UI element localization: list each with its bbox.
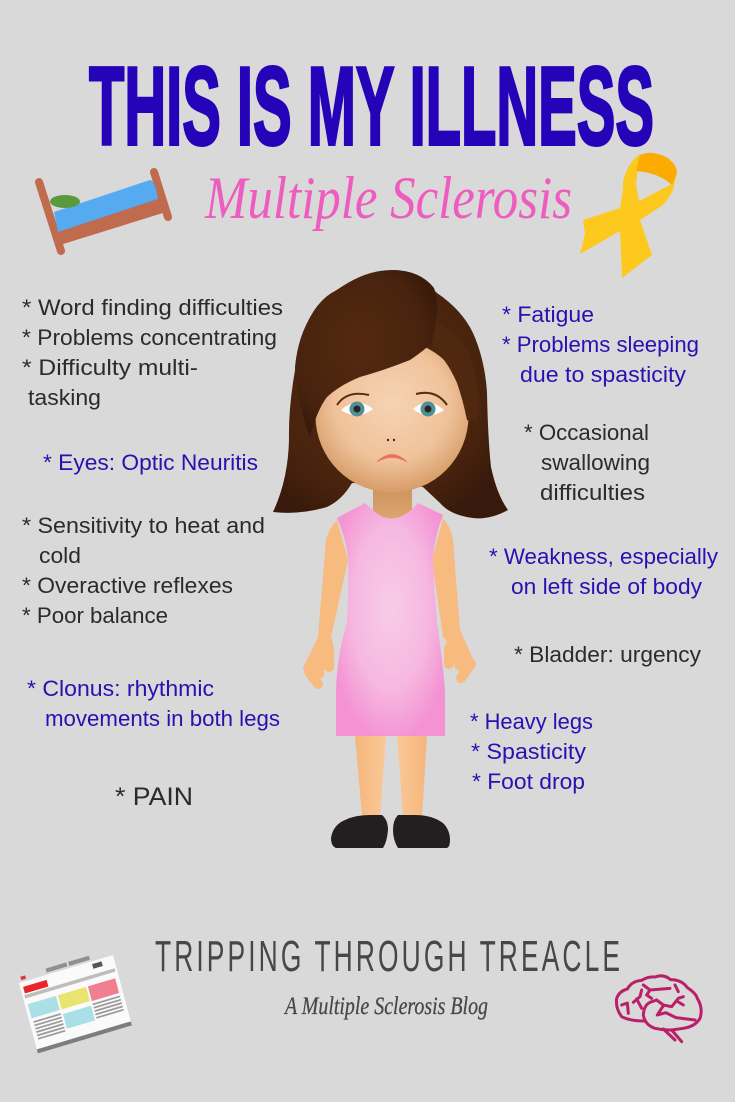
icon: awareness ribbon [580,153,677,278]
right symptoms: fatigue: * Fatigue [502,302,594,327]
left symptom: clonus [27,676,280,731]
icon: web page layout [17,949,132,1053]
left symptoms: cognitive: * Problems concentrating [22,325,277,350]
left symptoms: cognitive: * Word finding difficulties [22,295,283,320]
figure: sad girl [273,270,508,848]
icon: bed [39,172,168,251]
right symptom: swallowing: swallowing [541,450,650,475]
right symptoms: fatigue: due to spasticity [520,362,686,387]
left symptom: clonus: * Clonus: rhythmic [27,676,214,701]
blog name: TRIPPING THROUGH TREACLE [155,931,620,981]
front hair [295,270,437,437]
right symptom: weakness [489,544,718,599]
right symptom: swallowing [524,420,650,505]
face [316,340,468,492]
left symptoms: cognitive [22,295,283,410]
mouth [377,454,407,462]
blog tagline: A Multiple Sclerosis Blog [283,993,488,1020]
right symptom: swallowing: difficulties [540,480,645,505]
left symptoms: sensory and balance: cold [39,543,81,568]
neck [373,478,412,520]
left symptoms: cognitive: tasking [28,385,101,410]
left symptoms: sensory and balance: * Sensitivity to heat and [22,513,265,538]
left symptoms: cognitive: * Difficulty multi- [22,355,198,380]
right symptom: bladder: * Bladder: urgency [514,642,701,667]
nose [387,439,389,441]
left symptoms: sensory and balance [22,513,265,628]
left symptoms: sensory and balance: * Poor balance [22,603,168,628]
dress [336,503,445,736]
right symptoms: fatigue [502,302,699,387]
right symptoms: legs: * Foot drop [472,769,585,794]
right symptoms: legs: * Spasticity [471,739,586,764]
right symptoms: fatigue: * Problems sleeping [502,332,699,357]
arms [303,518,475,684]
left symptom: eyes: * Eyes: Optic Neuritis [43,450,258,475]
right symptom: weakness: on left side of body [511,574,702,599]
right symptom: weakness: * Weakness, especially [489,544,718,569]
left symptom: pain: * PAIN [115,783,193,811]
left symptom: clonus: movements in both legs [45,706,280,731]
eyebrows [337,393,447,405]
hair back [273,270,508,518]
subtitle: Multiple Sclerosis [204,165,572,231]
right symptom: swallowing: * Occasional [524,420,649,445]
left symptoms: sensory and balance: * Overactive reflexes [22,573,233,598]
eyes [341,403,444,415]
right symptoms: legs [470,709,593,794]
legs [355,736,427,816]
right hair lock [431,323,478,421]
right symptoms: legs: * Heavy legs [470,709,593,734]
shoes [331,815,450,848]
icon: brain [616,976,701,1042]
